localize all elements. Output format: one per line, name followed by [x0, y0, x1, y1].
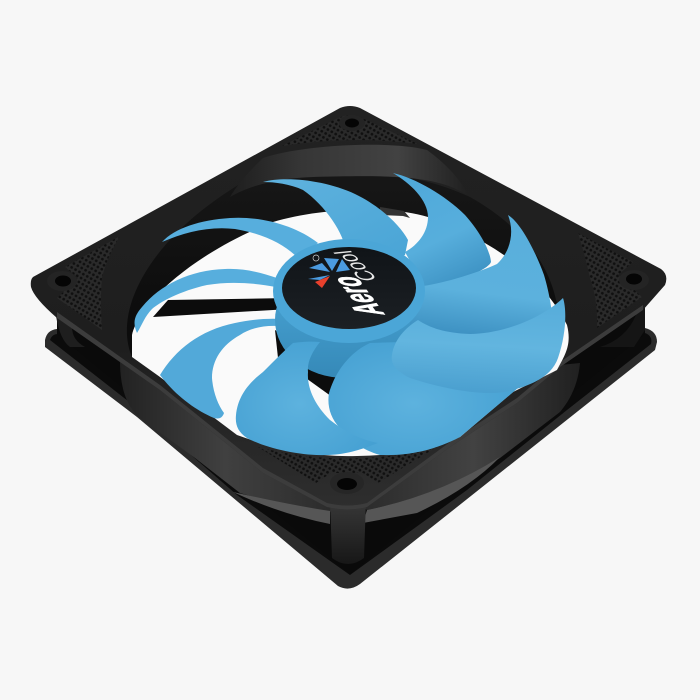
wall right	[350, 363, 580, 510]
blade top left long	[263, 179, 408, 262]
white opening	[132, 210, 569, 456]
fan blades front	[236, 173, 565, 455]
top plate of fan frame	[31, 106, 666, 510]
corner strut bottom	[330, 500, 366, 564]
hole right	[619, 270, 649, 290]
pad top	[282, 115, 418, 146]
bottom plate of fan frame	[45, 328, 657, 589]
mounting pads	[57, 115, 642, 483]
hub rim	[273, 239, 425, 343]
inner shroud wall	[127, 170, 567, 420]
logo text Aero: Aero	[321, 276, 394, 315]
mounting holes	[47, 115, 649, 494]
hub side wall	[275, 262, 415, 378]
grey band left	[233, 492, 330, 524]
support strut left	[153, 298, 290, 317]
support strut top right	[380, 207, 410, 218]
blade bottom	[236, 342, 378, 455]
corner strut left	[56, 316, 85, 347]
support strut bottom	[275, 330, 345, 399]
black gap behind wall	[57, 305, 645, 574]
fan blades back	[135, 179, 408, 418]
hole left	[47, 271, 77, 291]
hub face	[282, 247, 416, 329]
blade lower left	[160, 319, 282, 418]
blade top right	[393, 173, 491, 288]
blade right	[410, 215, 553, 335]
hole top	[339, 115, 365, 131]
grey band right	[363, 457, 500, 523]
pad right	[578, 233, 642, 328]
blade bottom right	[328, 340, 518, 455]
corner strut right	[600, 306, 645, 347]
logo mark	[308, 255, 350, 288]
blade left thin lower	[135, 269, 277, 333]
pad bottom	[258, 447, 437, 483]
lower lip highlight	[57, 305, 643, 510]
shroud ridge highlight	[230, 145, 470, 197]
logo text Cool: Cool	[328, 249, 383, 282]
hole bottom	[330, 472, 364, 494]
pad left	[57, 236, 120, 330]
blade left thin upper	[162, 218, 318, 258]
wall left	[120, 360, 345, 512]
frame side wall	[56, 305, 645, 574]
hub	[273, 239, 425, 343]
blade lower right	[392, 298, 565, 393]
